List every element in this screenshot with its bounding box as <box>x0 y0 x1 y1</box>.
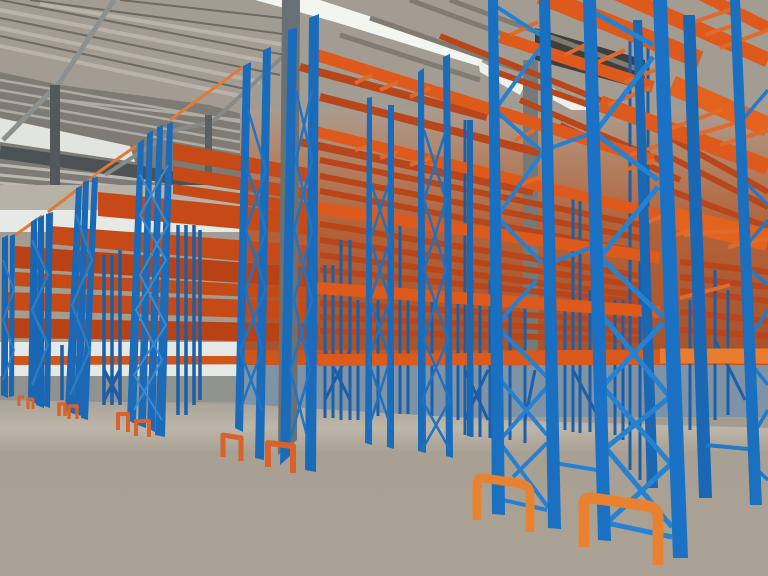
back wall windows and rear shelving backdrop <box>0 60 768 417</box>
orange post guards <box>19 397 658 565</box>
rack frame: middle pair <box>365 54 453 458</box>
rack frame: fourth left <box>127 122 173 437</box>
orange cross bars <box>355 8 768 298</box>
dark cross beam <box>0 152 240 190</box>
roof trusses <box>3 0 114 140</box>
guards center left <box>223 435 241 461</box>
right ceiling and skylights <box>255 0 645 120</box>
ceiling <box>0 0 768 240</box>
main orange beams <box>317 0 768 360</box>
rack frame: third left <box>65 177 98 420</box>
left rack shelves <box>5 143 318 365</box>
guards far left <box>19 397 33 409</box>
guards third left <box>118 414 149 437</box>
guards second left <box>59 404 77 419</box>
rear right posts <box>467 15 748 498</box>
rack frame: second left <box>28 212 53 408</box>
guards center right <box>268 443 293 473</box>
corrugated lower roof <box>0 72 280 190</box>
rack frame: front right 2 <box>583 0 688 558</box>
center shelves back rows <box>300 36 768 340</box>
rack frame: far left <box>1 234 15 398</box>
rack frame: front right 1 <box>488 0 597 529</box>
rack frame: center pair <box>235 14 319 472</box>
floor <box>0 400 768 576</box>
left thin blue background posts <box>48 225 200 415</box>
guard front right <box>584 498 658 565</box>
left roof-line beam <box>14 67 243 236</box>
thin blue background frames <box>325 30 745 488</box>
rack frame: far right <box>730 0 768 505</box>
grey building column <box>278 0 300 455</box>
guard front left <box>477 478 530 532</box>
